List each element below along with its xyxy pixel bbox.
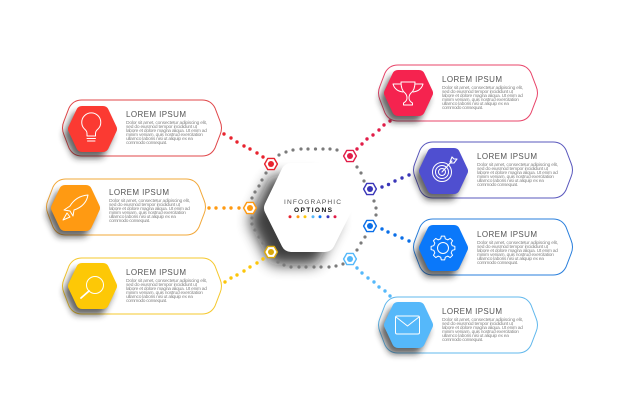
text block: ullamco laboris nisi ut aliquip ex ea [442,101,509,107]
text block: sed do eiusmod tempor incididunt ut [126,124,198,130]
text block [442,85,523,111]
text block [126,278,207,304]
text block: ullamco laboris nisi ut aliquip ex ea [126,136,193,142]
text block: Dolor sit amet, consectetur adipiscing elit, [442,85,523,91]
heading: LOREM IPSUM [442,75,502,84]
node: sky [344,253,356,265]
text block: commodo consequat. [109,218,150,224]
text block: sed do eiusmod tempor incididunt ut [109,202,181,208]
panel: right 2 (indigo) [414,142,572,198]
connector: crimson [355,119,392,151]
text block: Dolor sit amet, consectetur adipiscing elit, [109,198,190,204]
icon: trophy [390,76,427,110]
icon: envelope [390,308,427,342]
text block: labore et dolore magna aliqua. Ut enim ad [126,286,207,292]
heading: LOREM IPSUM [126,268,186,277]
text block: sed do eiusmod tempor incididunt ut [442,89,514,95]
panel: right 4 (sky) [378,297,538,353]
text block: sed do eiusmod tempor incididunt ut [442,321,514,327]
text block: minim veniam, quis nostrud exercitation [477,252,554,258]
text block: labore et dolore magna aliqua. Ut enim ad [442,325,523,331]
connector: orange [207,206,241,210]
text block: commodo consequat. [477,182,518,188]
heading: LOREM IPSUM [477,230,537,239]
text block: labore et dolore magna aliqua. Ut enim ad [442,93,523,99]
text block: Dolor sit amet, consectetur adipiscing elit, [477,240,558,246]
text block: minim veniam, quis nostrud exercitation [109,210,186,216]
text block: commodo consequat. [477,260,518,266]
text block: minim veniam, quis nostrud exercitation [126,132,203,138]
node: yellow [265,246,277,258]
text block: sed do eiusmod tempor incididunt ut [477,166,549,172]
center title: OPTIONS [294,207,333,214]
icon: light bulb [74,112,111,146]
text block [442,317,523,343]
panel: left middle (orange) [46,179,206,235]
text block: sed do eiusmod tempor incididunt ut [126,282,198,288]
connector: red [222,132,265,159]
text block: labore et dolore magna aliqua. Ut enim ad [126,128,207,134]
heading: LOREM IPSUM [109,188,169,197]
icon: gear [425,231,462,265]
text block: sed do eiusmod tempor incididunt ut [477,244,549,250]
center title: INFOGRAPHIC [284,199,341,206]
node: blue [364,220,376,232]
text block: minim veniam, quis nostrud exercitation [477,174,554,180]
panel: right 1 (crimson) [378,65,538,121]
text block: Dolor sit amet, consectetur adipiscing elit, [126,120,207,126]
text block: ullamco laboris nisi ut aliquip ex ea [477,256,544,262]
icon: target [425,154,462,188]
text block: minim veniam, quis nostrud exercitation [442,329,519,335]
connector: blue [380,227,411,243]
text block: Dolor sit amet, consectetur adipiscing elit, [442,317,523,323]
text block: ullamco laboris nisi ut aliquip ex ea [109,214,176,220]
text block: ullamco laboris nisi ut aliquip ex ea [442,333,509,339]
text block: commodo consequat. [442,337,483,343]
text block: commodo consequat. [126,298,167,304]
text block: labore et dolore magna aliqua. Ut enim ad [477,248,558,254]
text block: ullamco laboris nisi ut aliquip ex ea [126,294,193,300]
connector: sky [355,266,392,298]
text block [126,120,207,146]
text block: commodo consequat. [126,140,167,146]
panel: left top (red) [62,100,222,156]
heading: LOREM IPSUM [442,307,502,316]
heading: LOREM IPSUM [477,152,537,161]
text block [109,198,190,224]
text block: labore et dolore magna aliqua. Ut enim ad [109,206,190,212]
central hexagon [274,173,342,242]
color dots row [288,215,336,218]
node: orange [244,202,256,214]
node: crimson [344,150,356,162]
text block: Dolor sit amet, consectetur adipiscing elit, [477,162,558,168]
text block: commodo consequat. [442,105,483,111]
text block: Dolor sit amet, consectetur adipiscing elit, [126,278,207,284]
panel: left bottom (yellow) [62,258,222,314]
connector: yellow [223,257,265,284]
text block [477,162,558,188]
text block: minim veniam, quis nostrud exercitation [126,290,203,296]
icon: rocket [57,191,94,225]
icon: magnifier [74,269,111,303]
text block: labore et dolore magna aliqua. Ut enim ad [477,170,558,176]
heading: LOREM IPSUM [126,110,186,119]
panel: right 3 (blue) [414,219,572,275]
text block: ullamco laboris nisi ut aliquip ex ea [477,178,544,184]
central hexagon shadow [260,186,328,255]
center title [284,199,341,214]
text block [477,240,558,266]
node: indigo [364,183,376,195]
connector: indigo [380,173,411,189]
node: red [265,158,277,170]
text block: minim veniam, quis nostrud exercitation [442,97,519,103]
central ring of grey dots [250,147,378,269]
